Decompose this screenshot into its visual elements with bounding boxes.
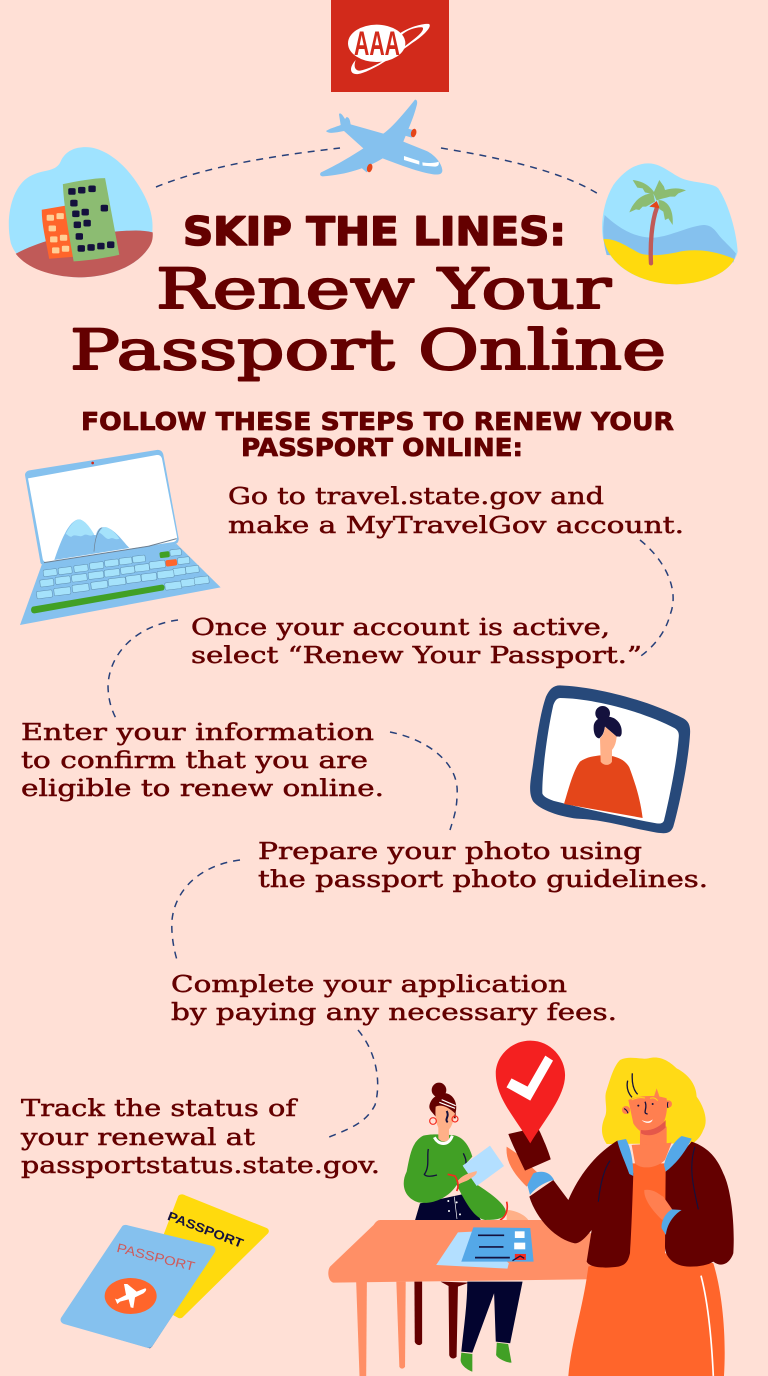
subheading: FOLLOW THESE STEPS TO RENEW YOUR [81,407,674,436]
illustration: standing woman [507,1057,734,1376]
step 6 text: passportstatus.state.gov. [21,1153,380,1179]
icon: hotel buildings [9,147,153,277]
AAA logo: AAA [354,25,400,63]
step 3 text [21,720,384,802]
blue passport [61,1225,215,1348]
step 4 text [258,839,708,893]
icon: airplane [320,100,442,176]
step 5 text [171,972,617,1026]
yellow passport [140,1194,269,1318]
step 5 text: by paying any necessary fees. [171,1000,617,1026]
icon: palm tree beach [602,163,738,284]
title [70,210,666,382]
table [328,1220,591,1376]
documents on table [436,1227,534,1269]
heading: passport online: Passport Online [70,318,666,382]
subheading: PASSPORT ONLINE: [241,433,523,462]
step 6 text [20,1096,380,1179]
step 2 text: select “Renew Your Passport.” [191,643,642,669]
step 1 text: Go to travel.state.gov and [228,484,604,510]
step 3 text: to confirm that you are [21,748,368,774]
dashed connector step 5 to 6 [327,1030,378,1138]
chair and trousers [414,1282,523,1372]
AAA logo [331,0,449,92]
step 6 text: your renewal at [20,1125,256,1151]
heading: skip the lines: SKIP THE LINES: [183,210,566,255]
step 6 text: Track the status of [21,1096,298,1122]
dashed flight path right [441,148,600,195]
icon: laptop [20,450,221,625]
step 4 text: Prepare your photo using [258,839,642,865]
step 3 text: Enter your information [21,720,374,746]
step 3 text: eligible to renew online. [21,776,384,802]
icon: passport photo frame [530,685,690,833]
step 5 text: Complete your application [171,972,567,998]
dashed connector step 2 to 3 [108,620,178,722]
subheading [81,407,674,462]
step 1 text [228,484,684,539]
dashed flight path left [156,148,340,187]
icon: location pin with check [496,1041,565,1143]
table and documents [328,1220,591,1376]
dashed connector step 1 to 2 [638,540,673,658]
yellow passport: PASSPORT [166,1209,246,1251]
step 2 text: Once your account is active, [191,615,610,641]
step 4 text: the passport photo guidelines. [258,867,708,893]
dashed connector step 3 to 4 [390,732,457,830]
illustration: seated woman [404,1083,528,1372]
step 1 text: make a MyTravelGov account. [228,513,684,539]
icon: passports [61,1194,269,1348]
heading: renew your: Renew Your [156,257,612,321]
blue passport: PASSPORT [115,1241,197,1274]
step 2 text [191,615,642,669]
dashed connector step 4 to 5 [172,860,240,960]
